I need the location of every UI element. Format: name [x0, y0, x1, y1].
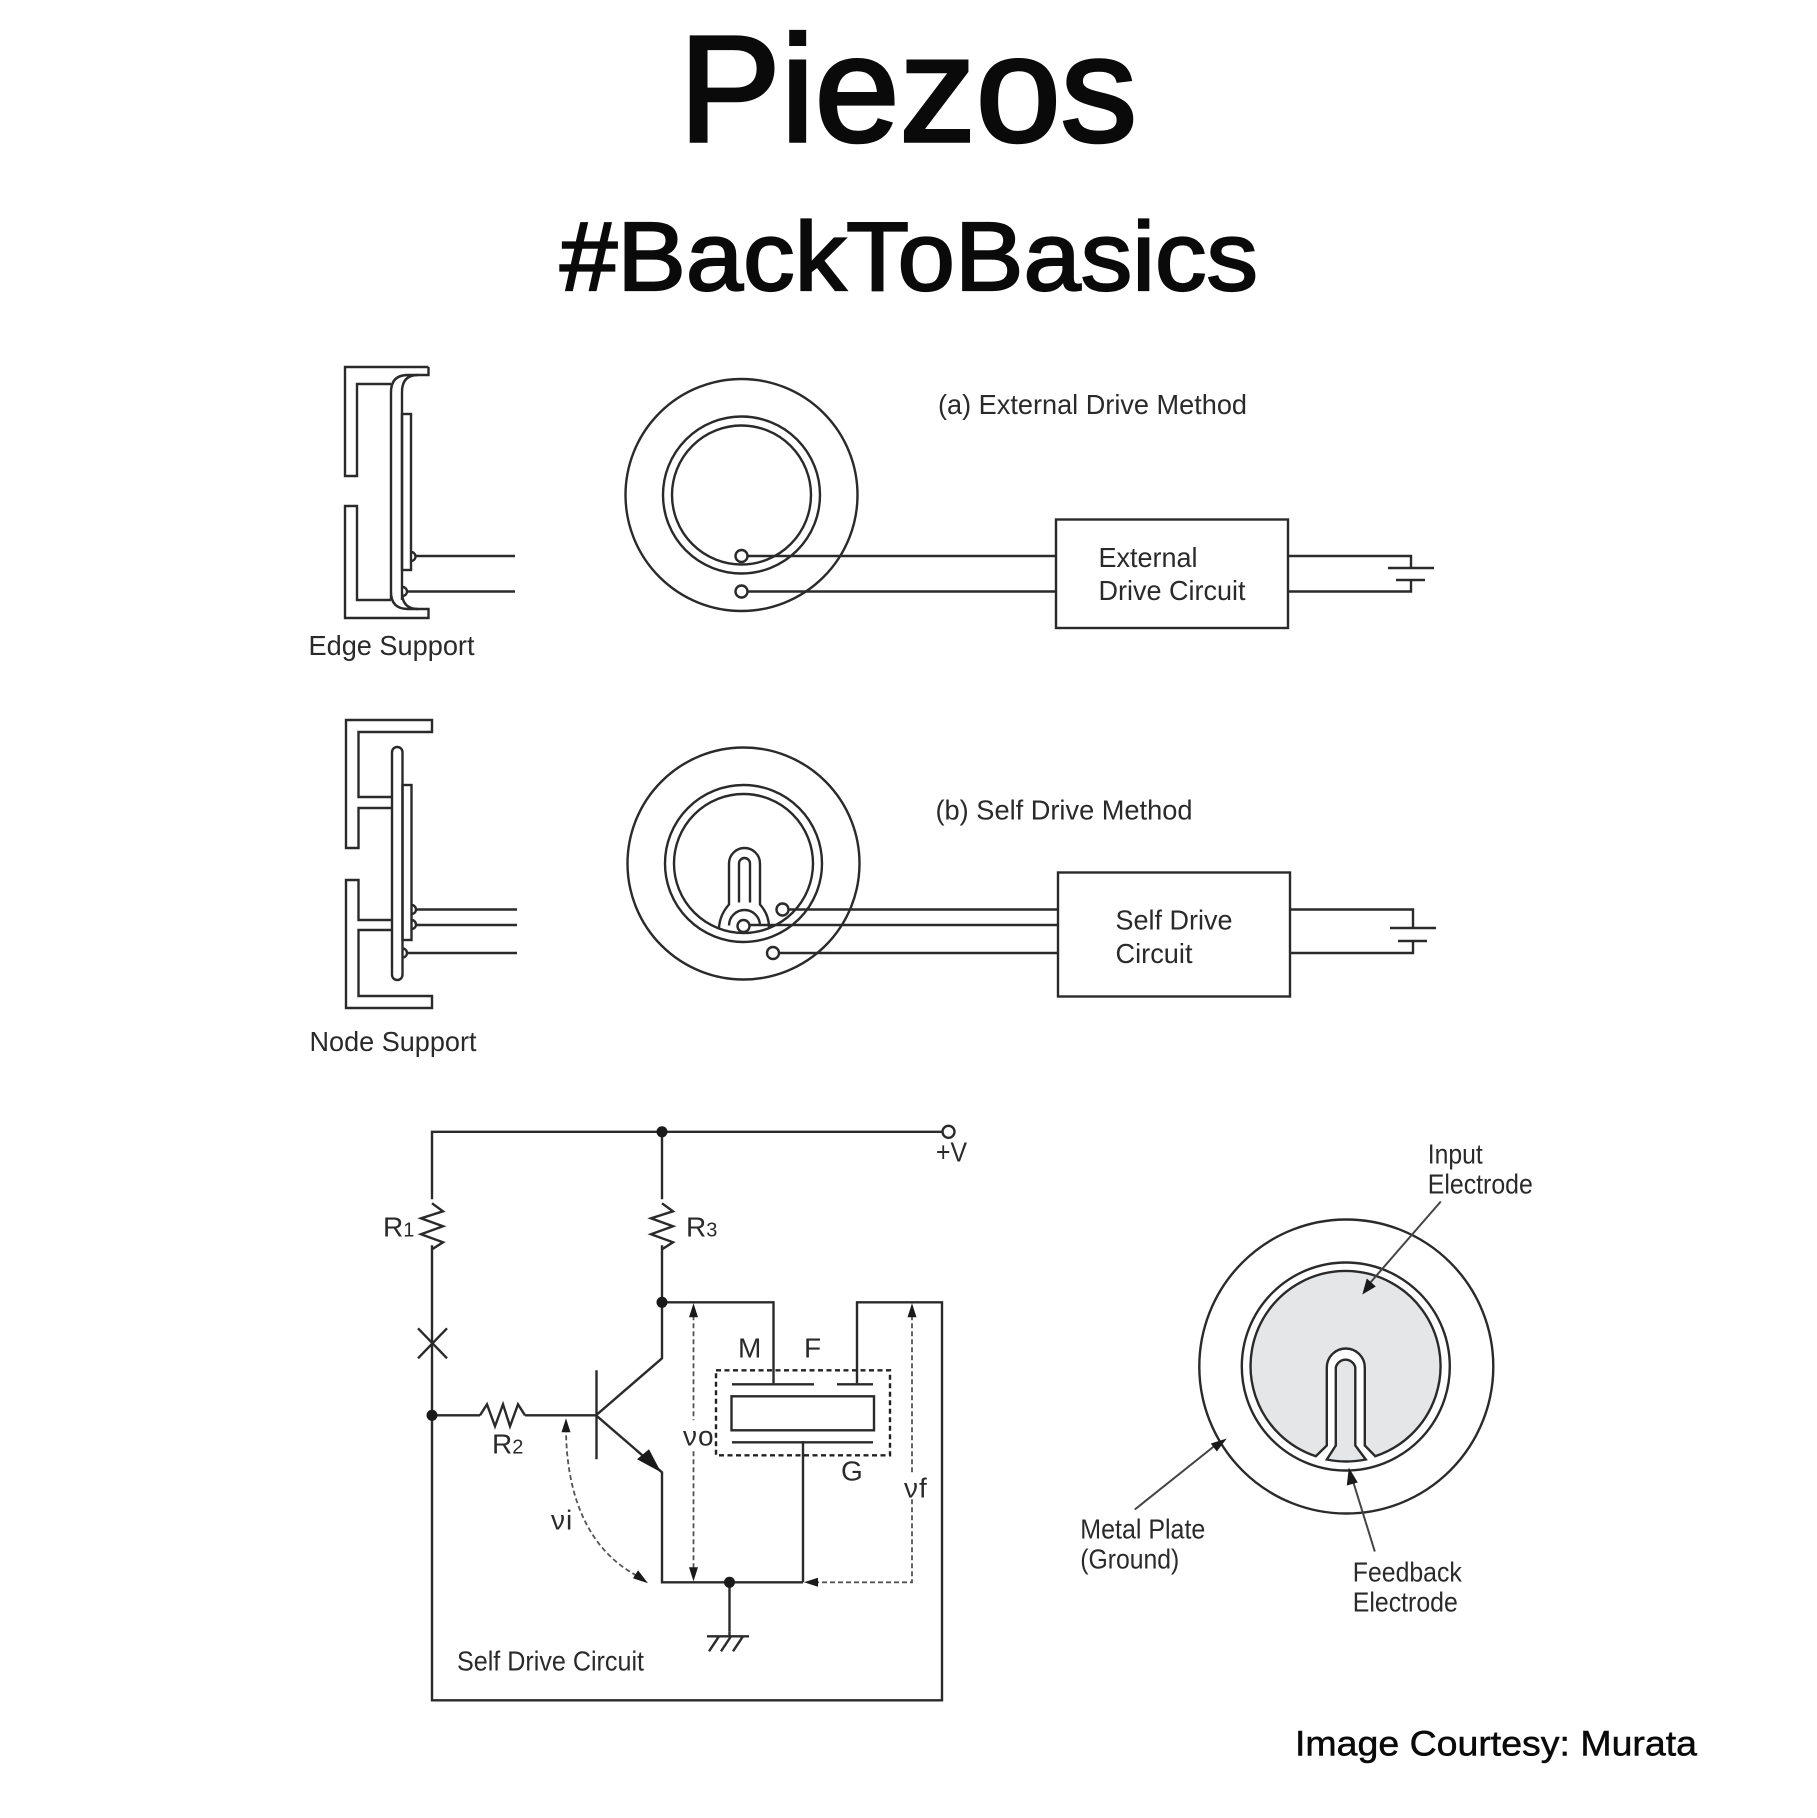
main wiring — [432, 1132, 942, 1700]
panel: self drive method — [628, 748, 1436, 996]
resistor R3 — [651, 1203, 673, 1249]
panel: node support mounting — [310, 720, 517, 1057]
panel: self drive circuit schematic — [383, 1126, 967, 1700]
arrow: feedback electrode — [1347, 1468, 1375, 1552]
panel: external drive method — [626, 379, 1434, 628]
circuit labels: R2 — [492, 1428, 523, 1459]
arrow: input electrode — [1362, 1202, 1441, 1294]
wires to circuit — [749, 910, 1058, 953]
feedback electrode — [1327, 1360, 1366, 1462]
circuit labels: M — [738, 1332, 761, 1363]
electrode labels: Metal Plate — [1080, 1514, 1205, 1544]
ceramic ring — [1242, 1262, 1450, 1470]
box label — [1098, 542, 1246, 606]
ceramic — [402, 414, 411, 570]
piezo element — [716, 1370, 890, 1455]
wires to circuit — [747, 556, 1056, 592]
image credit: Image Courtesy: Murata — [1295, 1724, 1698, 1764]
subtitle: #BackToBasics — [560, 202, 1258, 311]
box label: External — [1098, 542, 1198, 573]
arrow: metal plate — [1135, 1438, 1227, 1510]
terminals — [736, 550, 748, 598]
electrode labels: Input — [1428, 1138, 1483, 1170]
switch mark — [418, 1328, 447, 1358]
electrode labels: Feedback — [1353, 1556, 1463, 1588]
contacts and wires — [402, 552, 515, 596]
contacts and wires — [402, 905, 517, 958]
ground — [707, 1631, 749, 1651]
emitter arrow — [637, 1449, 661, 1472]
electrode labels: (Ground) — [1080, 1544, 1179, 1574]
method label: (a) External Drive Method — [938, 389, 1247, 420]
metal plate — [392, 747, 402, 980]
circuit labels — [383, 1136, 967, 1676]
junction dots — [426, 1126, 735, 1588]
circuit labels: G — [841, 1455, 863, 1486]
box label — [1116, 904, 1232, 969]
keyhole electrode — [719, 848, 769, 928]
electrode labels: Electrode — [1428, 1168, 1533, 1200]
edge support label: Edge Support — [308, 630, 475, 661]
circuit labels: νf — [904, 1472, 927, 1503]
circuit labels: R1 — [383, 1211, 414, 1242]
circuit labels: νo — [683, 1420, 714, 1451]
box label: Self Drive — [1116, 904, 1232, 936]
panel: edge support mounting — [308, 367, 515, 661]
voltage arrow vo — [689, 1303, 698, 1581]
bracket — [345, 367, 428, 618]
ceramic — [402, 785, 412, 940]
voltage arrow vi — [562, 1418, 648, 1583]
circuit labels: νi — [551, 1504, 572, 1535]
input electrode — [1251, 1271, 1441, 1456]
node support label: Node Support — [310, 1026, 477, 1057]
self drive circuit box — [1058, 872, 1290, 996]
circuit labels: F — [804, 1332, 821, 1363]
electrode labels — [1080, 1138, 1533, 1618]
electrode labels: Electrode — [1353, 1586, 1458, 1618]
resistor R2 — [480, 1404, 525, 1426]
title: Piezos — [679, 4, 1137, 173]
box label: Circuit — [1116, 938, 1193, 969]
circuit labels: +V — [936, 1136, 967, 1167]
method label: (b) Self Drive Method — [936, 794, 1192, 826]
transistor base bar — [595, 1370, 598, 1459]
external drive circuit box — [1056, 520, 1288, 628]
metal plate — [391, 375, 418, 609]
piezo disc — [628, 748, 860, 980]
voltage arrow vf — [804, 1303, 916, 1587]
circuit labels: Self Drive Circuit — [457, 1645, 644, 1676]
battery — [1288, 556, 1434, 592]
box label: Drive Circuit — [1098, 575, 1246, 606]
piezo disc — [626, 379, 858, 611]
panel: electrode diagram — [1080, 1138, 1533, 1618]
metal plate disc — [1199, 1220, 1493, 1514]
resistor R1 — [421, 1203, 443, 1249]
terminals — [738, 904, 788, 959]
circuit labels: R3 — [686, 1211, 717, 1242]
bracket — [346, 720, 432, 1008]
battery — [1290, 910, 1436, 953]
supply terminal — [942, 1126, 954, 1138]
